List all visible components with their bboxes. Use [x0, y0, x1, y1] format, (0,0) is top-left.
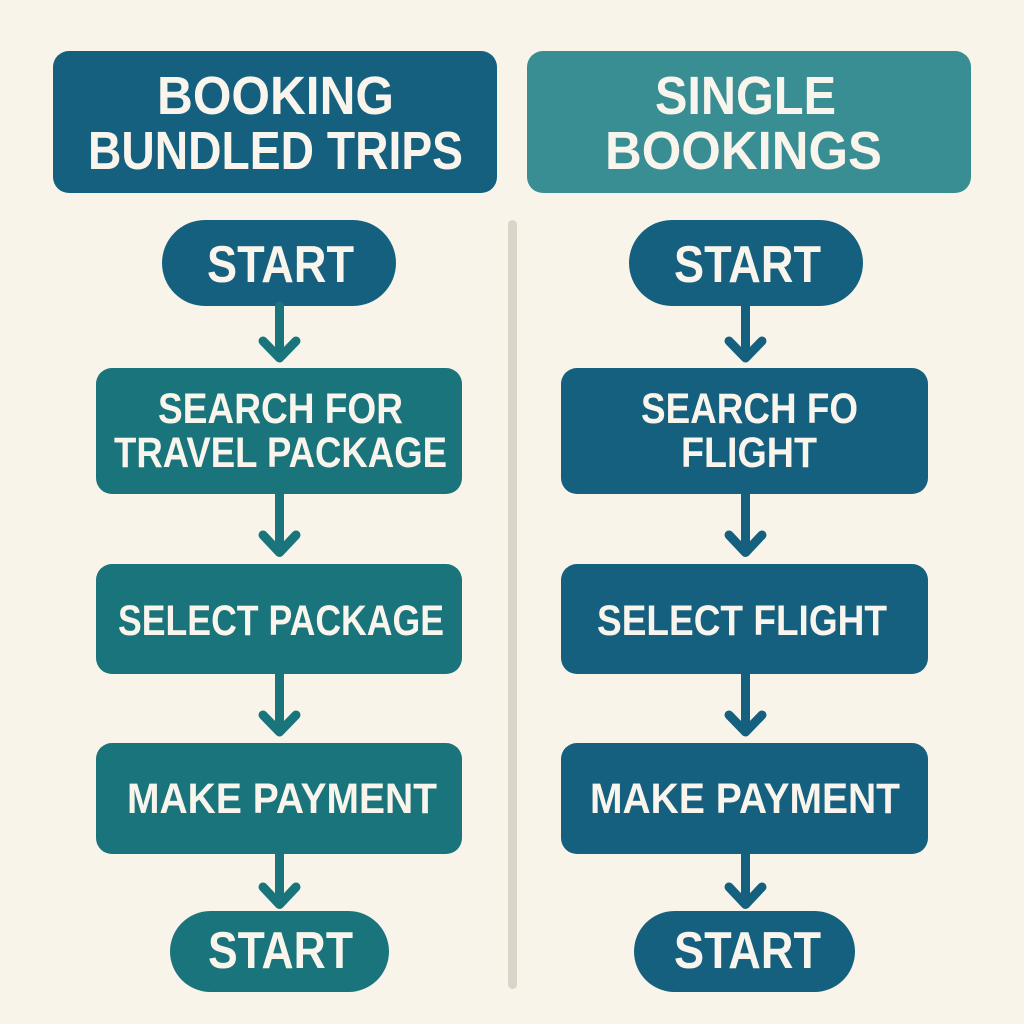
step: search for flight: [561, 368, 928, 494]
panel: single bookings header: BOOKINGS: [605, 121, 882, 181]
step: select flight: [561, 564, 928, 674]
panel: bundled trips header: [53, 51, 497, 193]
flowchart: single bookings: [561, 220, 928, 992]
step: search for flight: FLIGHT: [681, 429, 817, 477]
step: select package: SELECT PACKAGE: [118, 597, 444, 645]
column divider: [508, 220, 517, 989]
flowchart: bundled trips: [96, 220, 462, 992]
panel: single bookings header: SINGLE: [655, 66, 836, 126]
start pill: [162, 220, 396, 306]
panel: bundled trips header: BOOKING: [157, 66, 394, 126]
step: make payment: MAKE PAYMENT: [590, 775, 900, 823]
arrow: search to select: [729, 494, 762, 552]
arrow: start to search: [729, 306, 762, 358]
start pill: [629, 220, 863, 306]
end pill: [170, 911, 389, 992]
step: search for travel package: SEARCH FOR: [158, 385, 403, 433]
step: search for flight: SEARCH FO: [641, 385, 858, 433]
step: search for travel package: [96, 368, 462, 494]
start pill: START: [674, 236, 821, 294]
arrow: select to payment: [729, 674, 762, 732]
arrow: select to payment: [263, 674, 296, 732]
panel: bundled trips header: BUNDLED TRIPS: [88, 121, 463, 181]
end pill: [634, 911, 855, 992]
panel: single bookings header: [527, 51, 971, 193]
step: search for travel package: TRAVEL PACKAGE: [114, 429, 447, 477]
step: make payment: [561, 743, 928, 854]
arrow: start to search: [263, 306, 296, 358]
step: make payment: [96, 743, 462, 854]
step: select flight: SELECT FLIGHT: [597, 597, 887, 645]
step: select package: [96, 564, 462, 674]
arrow: payment to end: [263, 854, 296, 904]
end pill: START: [674, 922, 821, 980]
arrow: search to select: [263, 494, 296, 552]
step: make payment: MAKE PAYMENT: [127, 775, 437, 823]
start pill: START: [207, 236, 354, 294]
end pill: START: [208, 922, 353, 980]
arrow: payment to end: [729, 854, 762, 904]
